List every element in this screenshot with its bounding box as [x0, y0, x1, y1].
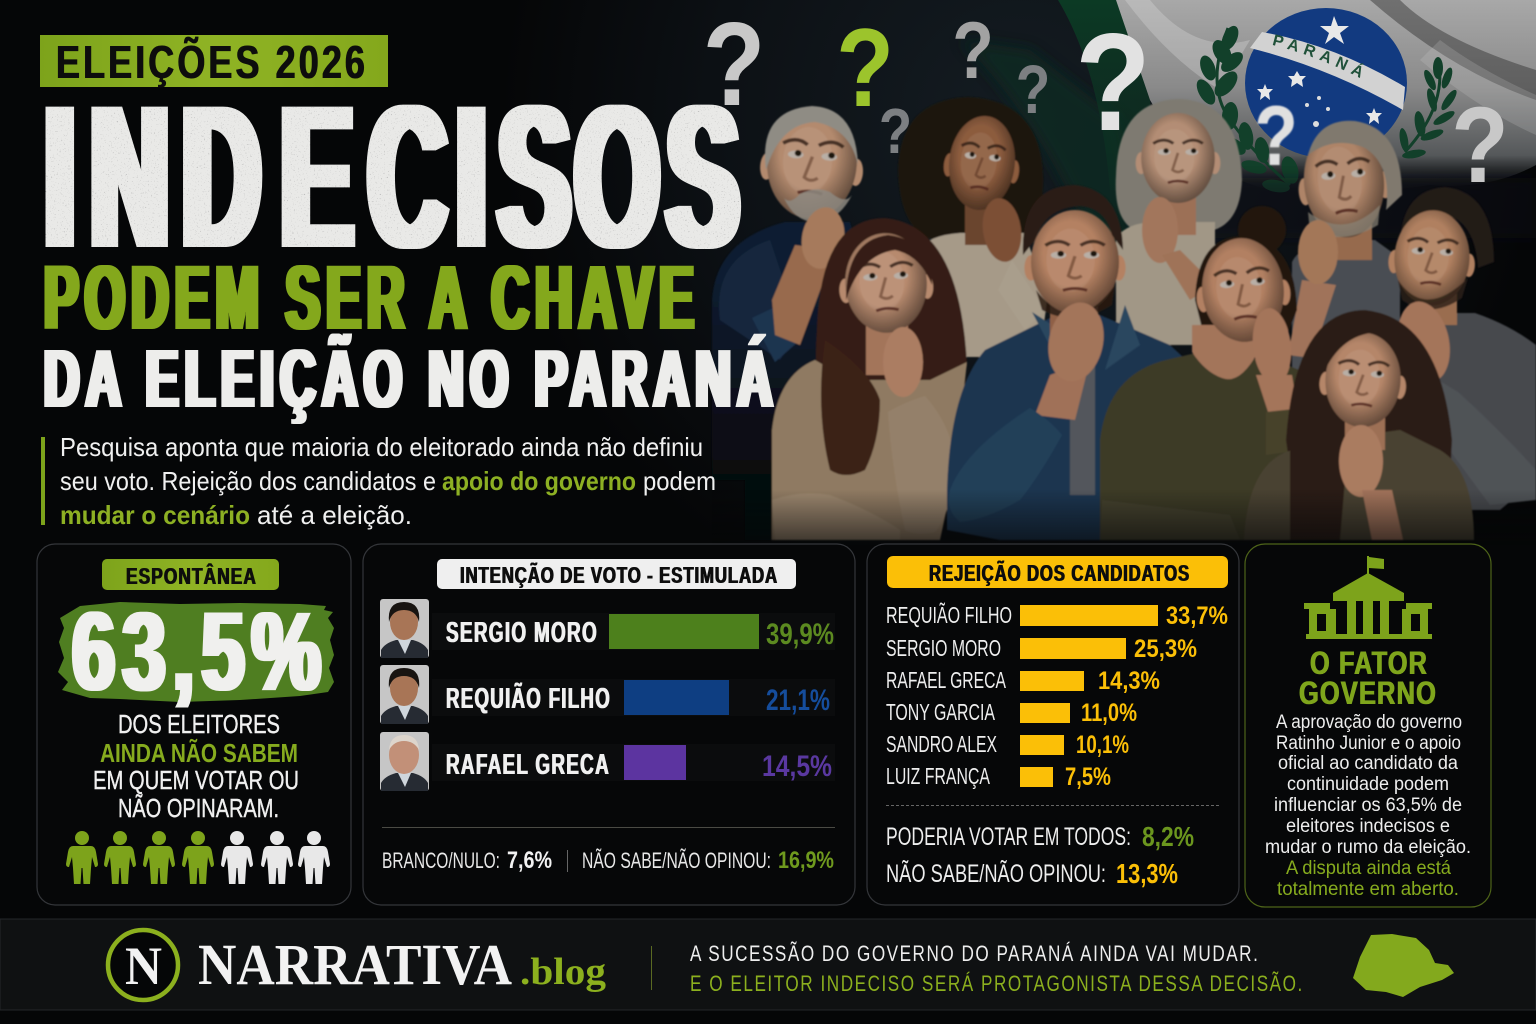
row: Rafael Greca	[886, 667, 1160, 695]
person: young man at right	[1386, 187, 1536, 510]
person: long-haired woman at left	[772, 218, 967, 540]
row: Sergio Moro: 25,3%	[1134, 635, 1197, 663]
espontânea caption: AINDA NÃO SABEM	[100, 738, 298, 768]
question mark 3: ?	[952, 4, 994, 95]
candidate: Requião Filho: REQUIÃO FILHO	[446, 681, 611, 715]
candidate: Requião Filho: 21,1%	[766, 684, 830, 717]
icon: map of Paraná	[1353, 934, 1454, 997]
question mark 1: ?	[703, 0, 765, 131]
flag wreath	[1193, 23, 1459, 194]
big number: 63,5%	[72, 589, 328, 714]
row: Rafael Greca: RAFAEL GRECA	[886, 667, 1006, 693]
intro text: Pesquisa aponta que maioria do eleitorado ainda não definiu	[60, 432, 703, 462]
row: Sergio Moro: SERGIO MORO	[886, 635, 1001, 661]
rejeição heading	[887, 556, 1228, 588]
row: Sergio Moro	[886, 635, 1197, 663]
fator governo heading: GOVERNO	[1299, 675, 1437, 711]
rejection chart	[886, 602, 1228, 791]
person: woman in front	[1244, 310, 1474, 540]
question mark 4: ?	[1016, 52, 1050, 128]
espontânea caption	[93, 709, 299, 823]
fator governo heading: O FATOR	[1310, 645, 1428, 681]
poderia votar em todos: PODERIA VOTAR EM TODOS:	[886, 823, 1131, 851]
heading: INTENÇÃO DE VOTO - ESTIMULADA	[460, 561, 778, 588]
person: curly woman	[898, 97, 1047, 357]
row: Tony Garcia: 11,0%	[1081, 699, 1137, 727]
intro text: mudar o cenário	[60, 500, 250, 530]
não sabe: NÃO SABE/NÃO OPINOU:	[582, 848, 771, 873]
title line 2: PODEM SER A CHAVE	[44, 247, 700, 349]
branco e nulo: BRANCO/NULO:	[382, 848, 500, 873]
candidate: Sergio Moro: SERGIO MORO	[446, 617, 598, 649]
fator governo body: eleitores indecisos e	[1286, 816, 1450, 837]
espontânea caption: EM QUEM VOTAR OU	[93, 765, 299, 795]
flag of Paraná	[978, 0, 1536, 232]
candidate: Rafael Greca: 14,5%	[762, 750, 832, 783]
row: Rafael Greca: 14,3%	[1098, 667, 1160, 695]
row: Requião Filho: 33,7%	[1166, 602, 1228, 630]
candidate: Rafael Greca	[380, 732, 835, 791]
people pictogram	[66, 831, 330, 884]
row: Sandro Alex: SANDRO ALEX	[886, 731, 997, 757]
person: gray-haired man	[1288, 121, 1402, 370]
poderia votar em todos: 8,2%	[1142, 821, 1194, 852]
não sabe rejeição: 13,3%	[1116, 858, 1178, 889]
row: Luiz França: LUIZ FRANÇA	[886, 763, 990, 789]
question mark 8: ?	[1451, 85, 1509, 205]
candidate: Sergio Moro: 39,9%	[766, 618, 834, 651]
candidate: Rafael Greca: RAFAEL GRECA	[446, 749, 610, 781]
question mark 2: ?	[836, 6, 894, 130]
panel: rejeição	[867, 544, 1239, 905]
badge: eleições 2026: ELEIÇÕES 2026	[56, 36, 368, 88]
footer	[0, 919, 1536, 1010]
row: Luiz França	[886, 763, 1111, 791]
question mark 7: ?	[1254, 88, 1298, 183]
brand name: NARRATIVA	[198, 932, 512, 997]
flag globe: PARANÁ	[1272, 34, 1364, 78]
intro text: seu voto. Rejeição dos candidatos e	[60, 466, 436, 496]
question mark 5: ?	[879, 95, 912, 167]
question mark 6: ?	[1075, 4, 1151, 160]
não sabe rejeição: NÃO SABE/NÃO OPINOU:	[886, 859, 1106, 888]
fator governo body: oficial ao candidato da	[1278, 753, 1458, 774]
intro text	[41, 432, 716, 530]
espontânea badge	[102, 559, 279, 590]
fator governo body: mudar o rumo da eleição.	[1265, 837, 1471, 858]
title line 3: DA ELEIÇÃO NO PARANÁ	[44, 332, 779, 425]
row: Tony Garcia: TONY GARCIA	[886, 699, 995, 725]
row: Requião Filho	[886, 602, 1228, 630]
panel: espontânea	[37, 544, 351, 905]
person: man in denim jacket	[947, 185, 1199, 540]
question marks	[703, 0, 1509, 205]
candidate: Sergio Moro	[380, 599, 835, 658]
fator governo body: A aprovação do governo	[1276, 712, 1462, 733]
branco e nulo: 7,6%	[507, 847, 552, 874]
fator governo body: influenciar os 63,5% de	[1274, 795, 1462, 816]
espontânea caption: NÃO OPINARAM.	[118, 793, 279, 823]
title line 1: INDECISOS	[45, 62, 739, 291]
row: Requião Filho: REQUIÃO FILHO	[886, 602, 1012, 628]
rejeição heading: REJEIÇÃO DOS CANDIDATOS	[929, 559, 1190, 586]
panel: intenção de voto	[363, 544, 855, 905]
heading	[437, 559, 796, 589]
person: gray-haired woman	[1116, 99, 1242, 345]
fator governo body: continuidade podem	[1287, 774, 1449, 795]
espontânea caption: DOS ELEITORES	[118, 709, 280, 739]
group of undecided voters	[712, 88, 1536, 540]
tagline: A SUCESSÃO DO GOVERNO DO PARANÁ AINDA VAI MUDAR.	[690, 940, 1258, 967]
tagline	[690, 940, 1302, 997]
intro text: apoio do governo	[442, 466, 636, 496]
person: woman with bun	[1100, 206, 1311, 540]
logo	[108, 930, 178, 1000]
row: Tony Garcia	[886, 699, 1137, 727]
big number	[58, 589, 334, 714]
row: Sandro Alex: 10,1%	[1076, 731, 1129, 759]
candidate: Requião Filho	[380, 665, 835, 724]
person: older man	[712, 104, 870, 540]
espontânea badge: ESPONTÂNEA	[126, 562, 257, 589]
fator governo heading	[1299, 645, 1437, 711]
row: Sandro Alex	[886, 731, 1129, 759]
não sabe: 16,9%	[778, 847, 834, 874]
intro text: podem	[643, 466, 716, 496]
flag globe	[1245, 8, 1407, 156]
logo: N	[125, 936, 162, 996]
tagline: E O ELEITOR INDECISO SERÁ PROTAGONISTA DESSA DECISÃO.	[690, 970, 1302, 997]
fator governo body: A disputa ainda está	[1286, 858, 1451, 879]
title	[44, 62, 779, 425]
row: Luiz França: 7,5%	[1065, 763, 1111, 791]
brand name: .blog	[520, 951, 606, 993]
icon: government building	[1304, 556, 1432, 639]
fator governo body: totalmente em aberto.	[1277, 879, 1459, 900]
fator governo body	[1265, 712, 1471, 900]
panel: fator governo	[1245, 544, 1491, 907]
fator governo body: Ratinho Junior e o apoio	[1276, 733, 1461, 754]
intro text: até a eleição.	[257, 500, 412, 530]
